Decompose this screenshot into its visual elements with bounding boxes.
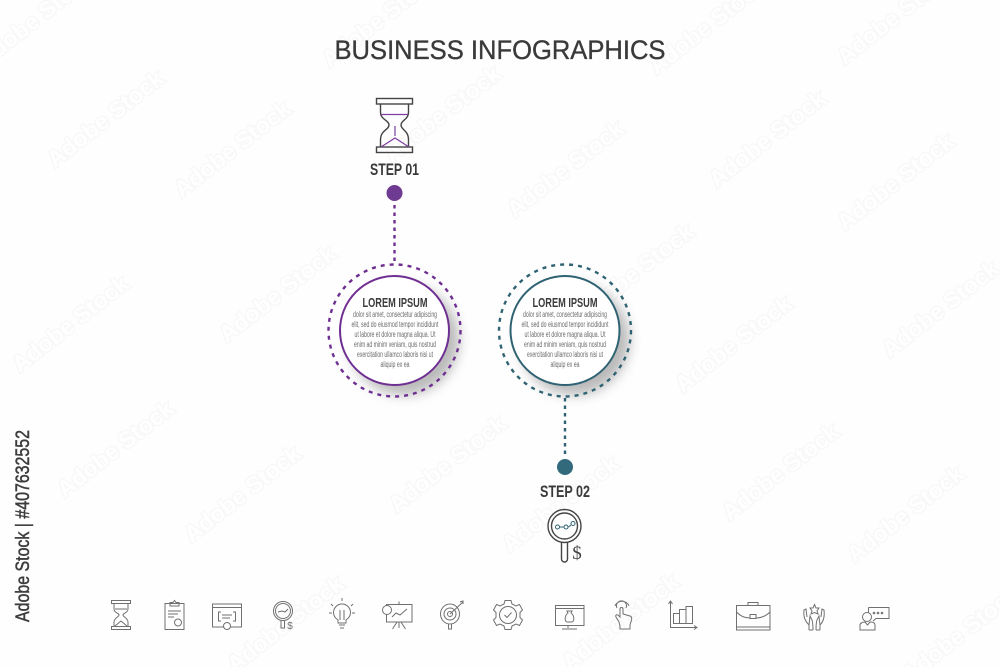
panel: circle 2 [499,264,631,396]
watermark pattern: Adobe Stock [384,410,511,517]
icon: hourglass [376,98,412,152]
circle 2 body text: dolor sit amet, consectetur adipiscing [523,310,607,319]
watermark pattern: Adobe Stock [379,60,506,167]
icon: gear with check [494,600,522,630]
watermark pattern: Adobe Stock [214,240,341,347]
icon: briefcase [736,602,770,630]
circle 2 heading: LOREM IPSUM [532,295,598,310]
circle 2 body text: enim ad minim veniam, quis nostrud [524,340,606,349]
watermark pattern: Adobe Stock [169,95,296,202]
watermark pattern: Adobe Stock [704,85,831,192]
circle 1 heading: LOREM IPSUM [362,295,428,310]
icon: bar chart [668,601,697,630]
circle 2 body text: aliquip ex ea [550,360,580,369]
circle 1 dashed ring [328,264,460,396]
step 01 dashed connector [393,205,396,264]
watermark pattern: Adobe Stock [497,450,624,557]
step 02 dashed connector [564,398,566,457]
icon: clipboard [165,600,184,630]
icon: certificate browser [212,604,242,630]
step 02 label: STEP 02 [540,482,590,501]
circle 1 shadow [349,285,459,395]
watermark pattern: Adobe Stock [52,395,179,502]
watermark pattern: Adobe Stock [717,418,844,525]
watermark pattern: Adobe Stock [832,128,959,235]
circle 2 body text [522,310,609,369]
circle 1 body text: enim ad minim veniam, quis nostrud [354,340,436,349]
stock id vertical text: Adobe Stock | #407632552 [13,430,34,622]
circle 2 body text: elit, sed do eiusmod tempor incididunt [522,320,609,329]
step 02 dot [557,459,573,475]
icon: hands holding star [804,604,824,630]
icon: touch hand [615,601,632,629]
icon: magnifier small [274,602,293,632]
icon: presentation board [382,602,412,629]
watermark pattern: Adobe Stock [842,460,969,567]
title: BUSINESS INFOGRAPHICS [334,35,666,65]
step 01 group [370,98,419,264]
circle 2 body text: ut labore et dolore magna aliqua. Ut [524,330,606,339]
circle 1 body text: exercitation ullamco laboris nisi ut [357,350,433,359]
step 01 dot [386,185,402,201]
circle 1 body text: dolor sit amet, consectetur adipiscing [353,310,437,319]
watermark pattern: Adobe Stock [7,270,134,377]
icon: magnifier with dollar [548,510,582,564]
icon row [112,598,889,632]
watermark pattern: Adobe Stock [179,440,306,547]
panel: circle 1 [328,264,460,396]
watermark pattern: Adobe Stock [502,115,629,222]
circle 2 dashed ring [499,264,631,396]
icon: light bulb [329,598,355,628]
watermark pattern: Adobe Stock [572,218,699,325]
watermark pattern: Adobe Stock [877,255,1000,362]
circle 2 shadow [520,285,630,395]
circle 1 disc [340,276,449,385]
watermark pattern: Adobe Stock [670,290,797,397]
circle 2 body text: exercitation ullamco laboris nisi ut [527,350,603,359]
icon: target [440,601,463,629]
icon: magnifier with dollar: $ [572,543,582,564]
circle 2 disc [510,276,620,385]
icon: monitor with money bag [556,606,584,629]
step 01 label: STEP 01 [370,160,419,179]
circle 1 body text: aliquip ex ea [380,360,410,369]
circle 1 body text: ut labore et dolore magna aliqua. Ut [354,330,436,339]
icon: hourglass small [112,600,130,630]
watermark pattern: Adobe Stock [42,65,169,172]
icon: person with speech bubble [860,608,889,630]
icon: magnifier small: $ [287,621,293,632]
step 02 group [540,398,590,564]
circle 1 body text [352,310,439,369]
circle 1 body text: elit, sed do eiusmod tempor incididunt [352,320,439,329]
